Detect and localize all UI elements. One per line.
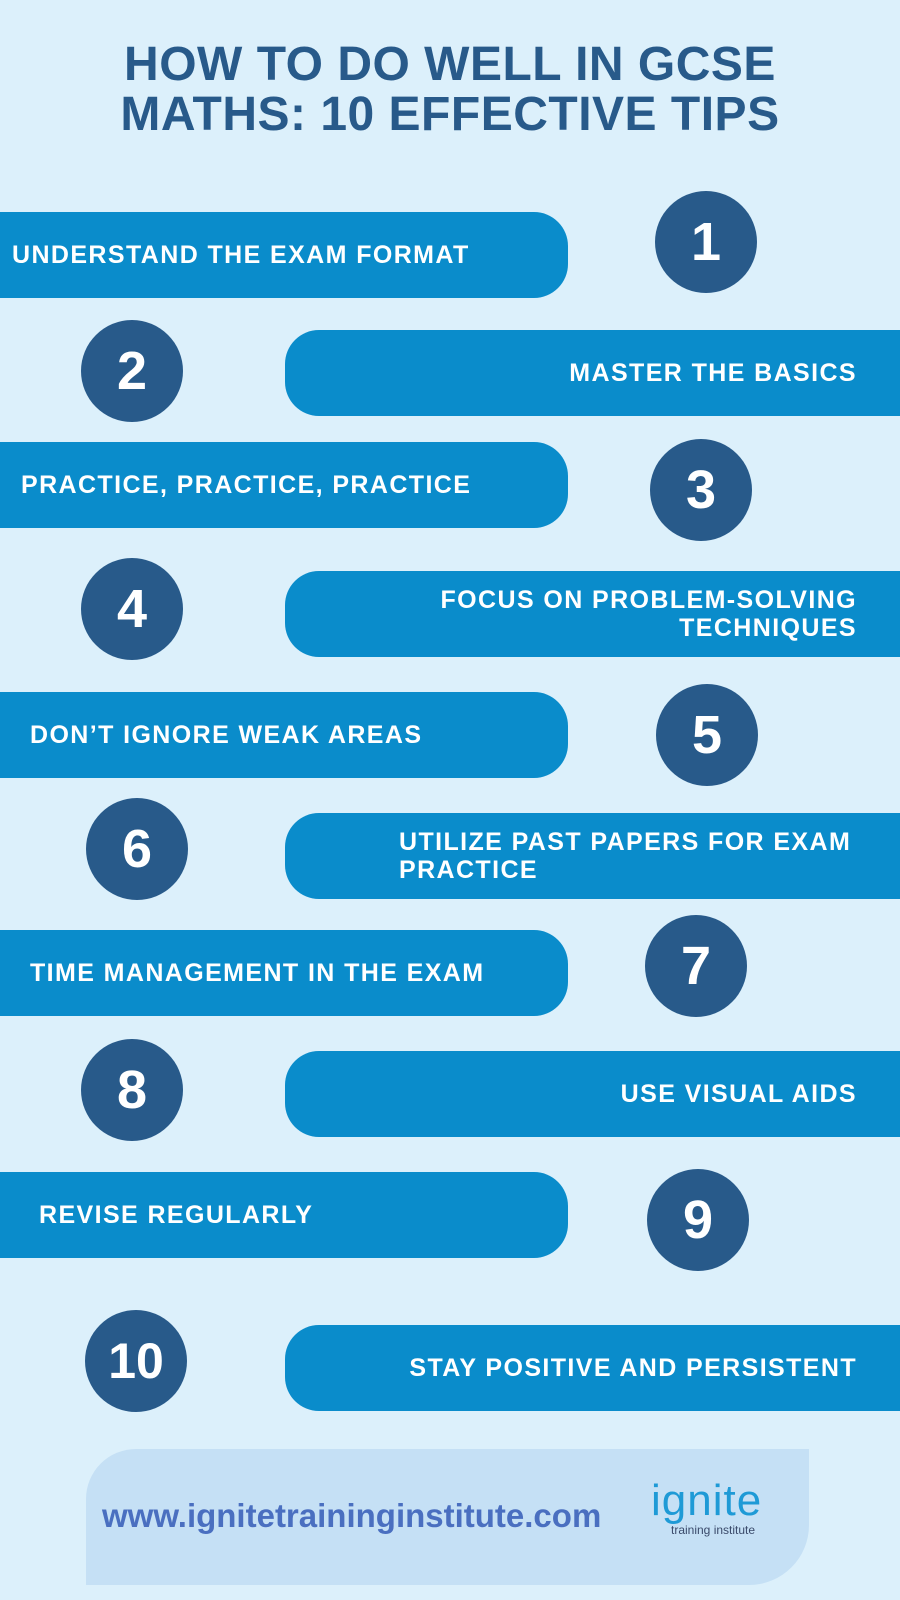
- circle 8: [81, 1039, 183, 1141]
- logo: training institute: [671, 1523, 755, 1537]
- tip 6 bar: UTILIZE PAST PAPERS FOR EXAM: [399, 828, 851, 856]
- tip 10 bar: STAY POSITIVE AND PERSISTENT: [409, 1354, 857, 1382]
- tip 7 bar: TIME MANAGEMENT IN THE EXAM: [30, 958, 484, 986]
- circle 7: [645, 915, 747, 1017]
- logo: ignite: [651, 1476, 762, 1525]
- tip 1 bar: [0, 212, 568, 298]
- circle 2: [81, 320, 183, 422]
- tip 5 bar: [0, 692, 568, 778]
- tip 2 bar: MASTER THE BASICS: [569, 359, 857, 387]
- circle 1: 1: [691, 212, 721, 272]
- circle 4: [81, 558, 183, 660]
- title: HOW TO DO WELL IN GCSE: [124, 38, 776, 91]
- tip 9 bar: REVISE REGULARLY: [39, 1200, 313, 1228]
- title: MATHS: 10 EFFECTIVE TIPS: [120, 88, 780, 141]
- circle 9: [647, 1169, 749, 1271]
- tip 6 bar: [285, 813, 900, 899]
- tip 3 bar: PRACTICE, PRACTICE, PRACTICE: [21, 470, 471, 498]
- circle 10: [85, 1310, 187, 1412]
- tip 1 bar: UNDERSTAND THE EXAM FORMAT: [12, 240, 470, 268]
- tip 5 bar: DON’T IGNORE WEAK AREAS: [30, 720, 422, 748]
- tip 2 bar: [285, 330, 900, 416]
- circle 2: 2: [117, 341, 147, 401]
- circle 8: 8: [117, 1060, 147, 1120]
- tip 7 bar: [0, 930, 568, 1016]
- tip 8 bar: [285, 1051, 900, 1137]
- tip 4 bar: TECHNIQUES: [679, 614, 857, 642]
- circle 7: 7: [681, 936, 711, 996]
- tip 4 bar: [285, 571, 900, 657]
- tip 6 bar: PRACTICE: [399, 856, 538, 884]
- circle 5: 5: [692, 705, 722, 765]
- website url: www.ignitetraininginstitute.com: [102, 1497, 601, 1534]
- circle 10: 10: [108, 1333, 164, 1389]
- tip 10 bar: [285, 1325, 900, 1411]
- circle 3: [650, 439, 752, 541]
- circle 4: 4: [117, 579, 147, 639]
- tip 9 bar: [0, 1172, 568, 1258]
- circle 6: 6: [122, 819, 152, 879]
- footer panel: [86, 1449, 809, 1585]
- tip 4 bar: FOCUS ON PROBLEM-SOLVING: [441, 586, 857, 614]
- circle 1: [655, 191, 757, 293]
- tip 3 bar: [0, 442, 568, 528]
- circle 6: [86, 798, 188, 900]
- circle 3: 3: [686, 460, 716, 520]
- circle 9: 9: [683, 1190, 713, 1250]
- tip 8 bar: USE VISUAL AIDS: [621, 1080, 857, 1108]
- circle 5: [656, 684, 758, 786]
- title: [120, 38, 780, 141]
